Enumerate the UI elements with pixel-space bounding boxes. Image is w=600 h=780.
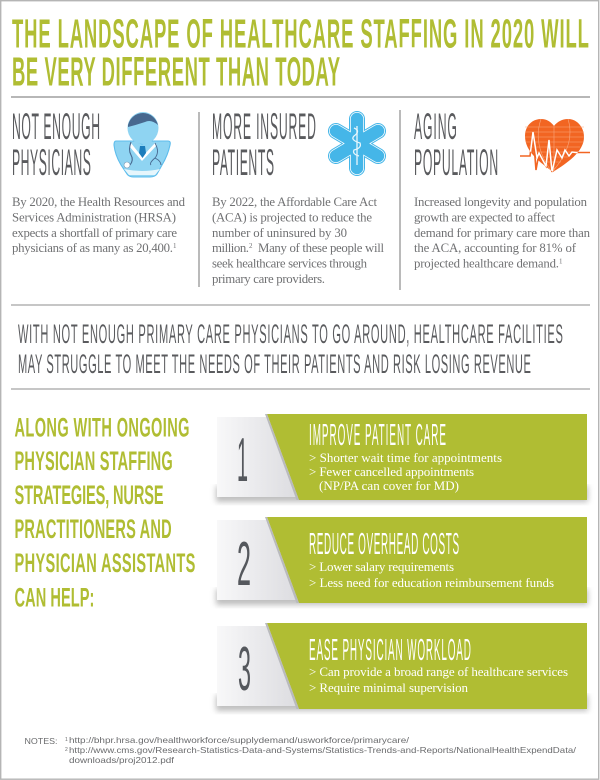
heading: aging population bbox=[414, 105, 498, 183]
card 3 list: > Can provide a broad range of healthcare services bbox=[309, 664, 568, 679]
body text: the ACA, accounting for 81% of bbox=[414, 241, 577, 255]
panel: card 1 improve patient care: 1 bbox=[237, 426, 248, 495]
notes: http://www.cms.gov/Research-Statistics-Data-and-Systems/Statistics-Trends-and-Reports/NationalHealthExpendData/ bbox=[69, 745, 577, 755]
card 3 list: > Require minimal supervision bbox=[309, 680, 468, 695]
card 2 heading: REDUCE OVERHEAD COSTS bbox=[309, 526, 459, 561]
heading: not enough physicians: PHYSICIANS bbox=[12, 141, 91, 183]
panel: more insured patients bbox=[212, 105, 384, 286]
panel: card 1 improve patient care bbox=[216, 414, 588, 502]
heading: aging population: AGING bbox=[414, 105, 457, 147]
icon: physician bbox=[114, 112, 170, 177]
body text: Many of these people will bbox=[258, 241, 384, 255]
body text: number of uninsured by 30 bbox=[212, 226, 347, 240]
panel: card 2 reduce overhead costs: 2 bbox=[237, 530, 251, 599]
heading: more insured patients: MORE INSURED bbox=[212, 105, 316, 147]
callout: along with ongoing strategies: PRACTITIONERS AND bbox=[14, 513, 172, 544]
body text bbox=[212, 195, 384, 286]
body text: (ACA) is projected to reduce the bbox=[212, 210, 372, 224]
card 1 heading: IMPROVE PATIENT CARE bbox=[309, 417, 446, 452]
panel: aging population bbox=[414, 105, 591, 270]
callout: along with ongoing strategies: PHYSICIAN ASSISTANTS bbox=[14, 547, 195, 578]
heading: not enough physicians: NOT ENOUGH bbox=[12, 105, 100, 147]
body text: expects a shortfall of primary care bbox=[12, 226, 177, 240]
panel: card 3 ease physician workload: 3 bbox=[238, 635, 251, 704]
notes: http://bhpr.hrsa.gov/healthworkforce/supplydemand/usworkforce/primarycare/ bbox=[69, 735, 410, 745]
notes bbox=[24, 735, 577, 765]
body text: Services Administration (HRSA) bbox=[12, 210, 176, 224]
statement: WITH NOT ENOUGH PRIMARY CARE PHYSICIANS TO GO AROUND, HEALTHCARE FACILITIES bbox=[18, 319, 563, 350]
body text bbox=[12, 195, 186, 255]
body text: projected healthcare demand. bbox=[414, 256, 559, 270]
statement bbox=[18, 319, 563, 380]
callout: along with ongoing strategies: PHYSICIAN STAFFING bbox=[14, 445, 173, 476]
card 2 list: > Less need for education reimbursement funds bbox=[309, 575, 554, 590]
body text: physicians of as many as 20,400. bbox=[12, 241, 173, 255]
heading: not enough physicians bbox=[12, 105, 100, 183]
icon: heart with pulse bbox=[520, 119, 590, 172]
card 1 list: (NP/PA can cover for MD) bbox=[319, 478, 459, 493]
card 1 list: > Fewer cancelled appointments bbox=[309, 464, 474, 479]
card 2 list bbox=[309, 559, 554, 590]
card 1 list: > Shorter wait time for appointments bbox=[309, 450, 502, 465]
body text: growth are expected to affect bbox=[414, 210, 555, 224]
notes: 1 bbox=[65, 737, 68, 743]
title: THE LANDSCAPE OF HEALTHCARE STAFFING IN 2020 WILL bbox=[12, 10, 589, 57]
card 1 list bbox=[309, 450, 502, 493]
callout: along with ongoing strategies: ALONG WITH ONGOING bbox=[14, 412, 189, 443]
body text: By 2020, the Health Resources and bbox=[12, 195, 186, 209]
callout: along with ongoing strategies: CAN HELP: bbox=[14, 582, 94, 613]
panel: not enough physicians bbox=[12, 105, 186, 255]
body text: Increased longevity and population bbox=[414, 195, 588, 209]
body text: demand for primary care more than bbox=[414, 226, 591, 240]
callout: along with ongoing strategies: STRATEGIES, NURSE bbox=[14, 479, 164, 510]
statement: MAY STRUGGLE TO MEET THE NEEDS OF THEIR PATIENTS AND RISK LOSING REVENUE bbox=[18, 349, 531, 380]
heading: aging population: POPULATION bbox=[414, 141, 498, 183]
body text bbox=[414, 195, 591, 270]
panel: card 2 reduce overhead costs bbox=[216, 517, 588, 605]
heading: more insured patients: PATIENTS bbox=[212, 141, 274, 183]
title: BE VERY DIFFERENT THAN TODAY bbox=[12, 48, 340, 95]
body text: primary care providers. bbox=[212, 272, 325, 286]
card 2 list: > Lower salary requirements bbox=[309, 559, 454, 574]
title bbox=[12, 10, 589, 95]
panel: card 3 ease physician workload bbox=[216, 623, 588, 711]
body text: million. bbox=[212, 241, 249, 255]
heading: more insured patients bbox=[212, 105, 316, 183]
callout: along with ongoing strategies bbox=[14, 412, 195, 613]
body text: 1 bbox=[173, 242, 177, 250]
card 3 list bbox=[309, 664, 568, 695]
notes: 2 bbox=[65, 747, 68, 753]
body text: By 2022, the Affordable Care Act bbox=[212, 195, 377, 209]
icon: star of life bbox=[336, 119, 378, 168]
body text: seek healthcare services through bbox=[212, 256, 368, 270]
notes: NOTES: bbox=[24, 736, 58, 746]
body text: 1 bbox=[559, 258, 563, 266]
body text: 2 bbox=[249, 242, 253, 250]
card 3 heading: EASE PHYSICIAN WORKLOAD bbox=[309, 632, 471, 667]
notes: downloads/proj2012.pdf bbox=[69, 755, 175, 765]
